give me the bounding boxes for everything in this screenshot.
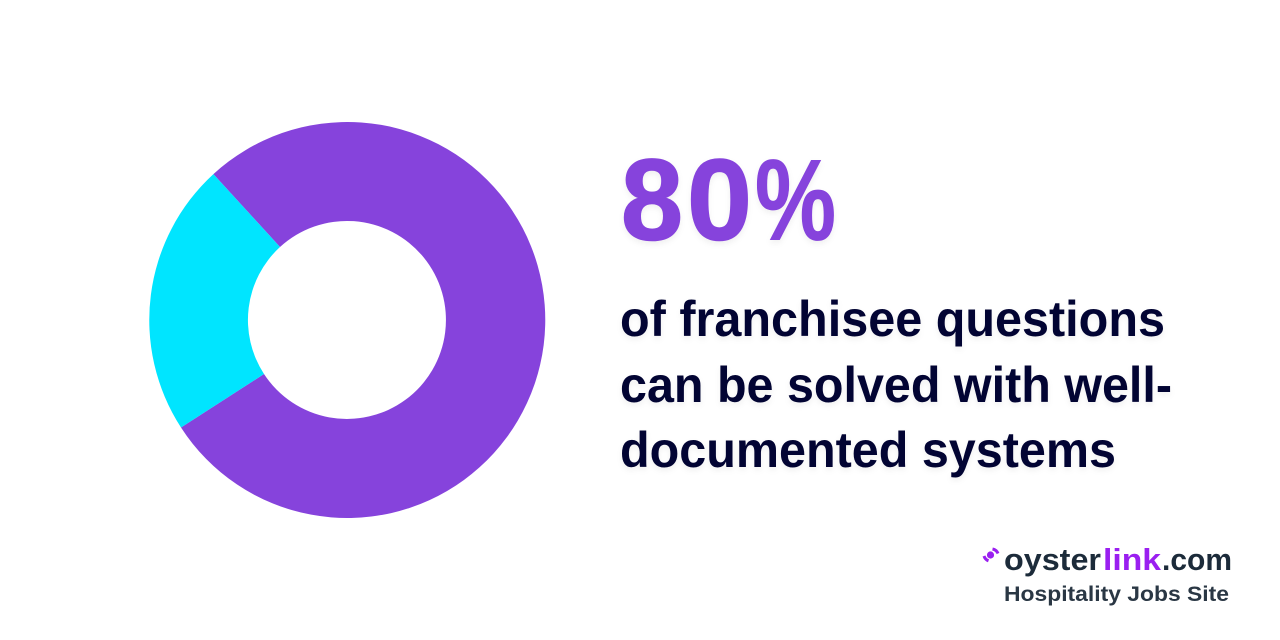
logo wordmark: link — [1103, 542, 1162, 577]
statement text: can be solved with well- — [620, 357, 1172, 413]
donut segment: purple 80% — [181, 122, 545, 518]
big statistic: 80%: 0 — [687, 136, 752, 264]
big statistic: 80% — [621, 136, 836, 264]
logo wordmark: .com — [1162, 542, 1232, 577]
logo wordmark: oyster — [1004, 542, 1101, 577]
logo wordmark — [1004, 542, 1232, 577]
statement text — [620, 291, 1172, 478]
big statistic: 80%: % — [755, 136, 836, 264]
donut segment: cyan remainder — [149, 174, 280, 428]
donut chart — [149, 122, 545, 518]
statement text: documented systems — [620, 422, 1116, 478]
logo tagline: Hospitality Jobs Site — [1004, 583, 1229, 606]
big statistic: 80%: 8 — [621, 136, 683, 264]
statement text: of franchisee questions — [620, 291, 1165, 347]
icon: oyster signal — [984, 549, 998, 561]
oysterlink logo — [984, 542, 1232, 606]
